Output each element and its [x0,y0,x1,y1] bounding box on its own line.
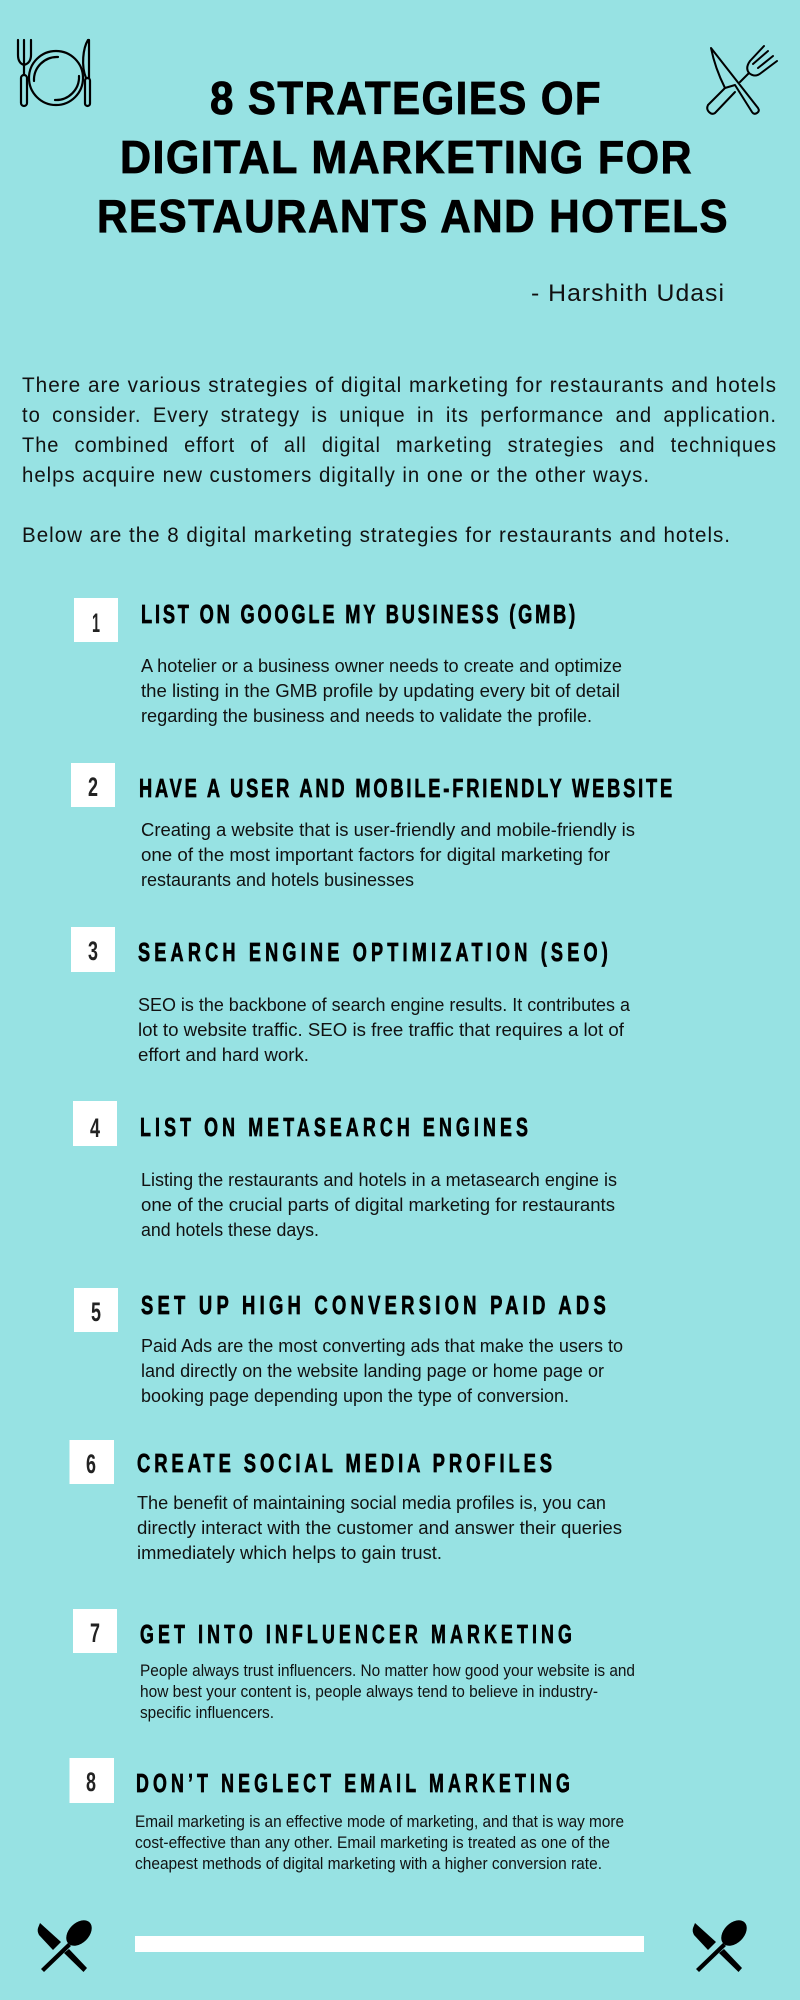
number badge 1 [74,598,118,642]
panel: strategy 8 [70,1758,624,1873]
description 2 [141,820,635,890]
number badge 1: 1 [92,608,100,638]
description 6: directly interact with the customer and answer their queries [137,1518,622,1538]
heading 3: SEARCH ENGINE OPTIMIZATION (SEO) [138,937,612,967]
description 7: how best your content is, people always tend to believe in industry- [140,1683,598,1701]
description 7: People always trust influencers. No matter how good your website is and [140,1662,635,1680]
panel: strategy 1 [74,598,622,726]
description 4 [141,1170,617,1240]
title: RESTAURANTS AND HOTELS [97,190,729,242]
description 1: regarding the business and needs to validate the profile. [141,706,592,726]
description 4: Listing the restaurants and hotels in a metasearch engine is [141,1170,617,1190]
heading 1: LIST ON GOOGLE MY BUSINESS (GMB) [141,599,578,629]
panel: strategy 5 [74,1288,623,1406]
intro paragraph [22,374,777,487]
number badge 6 [70,1440,114,1484]
description 2: Creating a website that is user-friendly and mobile-friendly is [141,820,635,840]
panel: strategy 6 [70,1440,622,1563]
description 6: immediately which helps to gain trust. [137,1543,442,1563]
description 1: the listing in the GMB profile by updating every bit of detail [141,681,620,701]
intro paragraph: helps acquire new customers digitally in one or the other ways. [22,464,650,487]
description 5 [141,1336,623,1406]
icon: spoon and knife, right [693,1915,752,1972]
panel: strategy 3 [71,927,631,1065]
panel: strategy 7 [73,1609,635,1722]
description 5: booking page depending upon the type of conversion. [141,1386,569,1406]
title: DIGITAL MARKETING FOR [120,131,693,183]
author byline: - Harshith Udasi [531,280,725,307]
icon: plate with fork and knife [18,40,90,106]
title: 8 STRATEGIES OF [210,72,602,124]
intro paragraph: The combined effort of all digital marketing strategies and techniques [22,434,777,457]
description 7: specific influencers. [140,1704,274,1722]
description 5: Paid Ads are the most converting ads that make the users to [141,1336,623,1356]
number badge 4: 4 [90,1113,100,1143]
description 8: Email marketing is an effective mode of marketing, and that is way more [135,1813,624,1831]
footer bar [135,1936,644,1952]
intro lead-in sentence: Below are the 8 digital marketing strategies for restaurants and hotels. [22,524,731,547]
heading 7: GET INTO INFLUENCER MARKETING [140,1619,576,1649]
icon: crossed knife and fork [707,46,777,114]
number badge 8 [70,1758,114,1803]
description 1 [141,656,622,726]
title [97,72,729,242]
description 4: one of the crucial parts of digital marketing for restaurants [141,1195,615,1215]
description 3: lot to website traffic. SEO is free traffic that requires a lot of [138,1020,625,1040]
description 8 [135,1813,624,1873]
number badge 6: 6 [86,1449,96,1479]
number badge 7 [73,1609,117,1653]
description 2: one of the most important factors for digital marketing for [141,845,610,865]
description 3: effort and hard work. [138,1045,309,1065]
description 5: land directly on the website landing page or home page or [141,1361,604,1381]
description 1: A hotelier or a business owner needs to create and optimize [141,656,622,676]
intro paragraph: There are various strategies of digital marketing for restaurants and hotels [22,374,777,397]
number badge 5: 5 [91,1297,101,1327]
intro paragraph: to consider. Every strategy is unique in its performance and application. [22,404,777,427]
heading 8: DON’T NEGLECT EMAIL MARKETING [136,1768,574,1798]
description 6: The benefit of maintaining social media profiles is, you can [137,1493,606,1513]
description 7 [140,1662,635,1722]
description 2: restaurants and hotels businesses [141,870,414,890]
number badge 3: 3 [88,936,98,966]
number badge 4 [73,1101,117,1146]
panel: strategy 4 [73,1101,617,1240]
heading 6: CREATE SOCIAL MEDIA PROFILES [137,1448,556,1478]
number badge 2: 2 [88,772,98,802]
description 8: cost-effective than any other. Email marketing is treated as one of the [135,1834,610,1852]
description 4: and hotels these days. [141,1220,319,1240]
number badge 2 [71,763,115,807]
description 6 [137,1493,622,1563]
heading 4: LIST ON METASEARCH ENGINES [140,1112,532,1142]
heading 5: SET UP HIGH CONVERSION PAID ADS [141,1290,610,1320]
number badge 5 [74,1288,118,1332]
panel: strategy 2 [71,763,675,890]
description 8: cheapest methods of digital marketing with a higher conversion rate. [135,1855,602,1873]
number badge 8: 8 [86,1767,96,1797]
number badge 3 [71,927,115,972]
icon: spoon and knife, left [38,1915,97,1972]
description 3 [138,995,631,1065]
number badge 7: 7 [90,1618,100,1648]
description 3: SEO is the backbone of search engine results. It contributes a [138,995,631,1015]
